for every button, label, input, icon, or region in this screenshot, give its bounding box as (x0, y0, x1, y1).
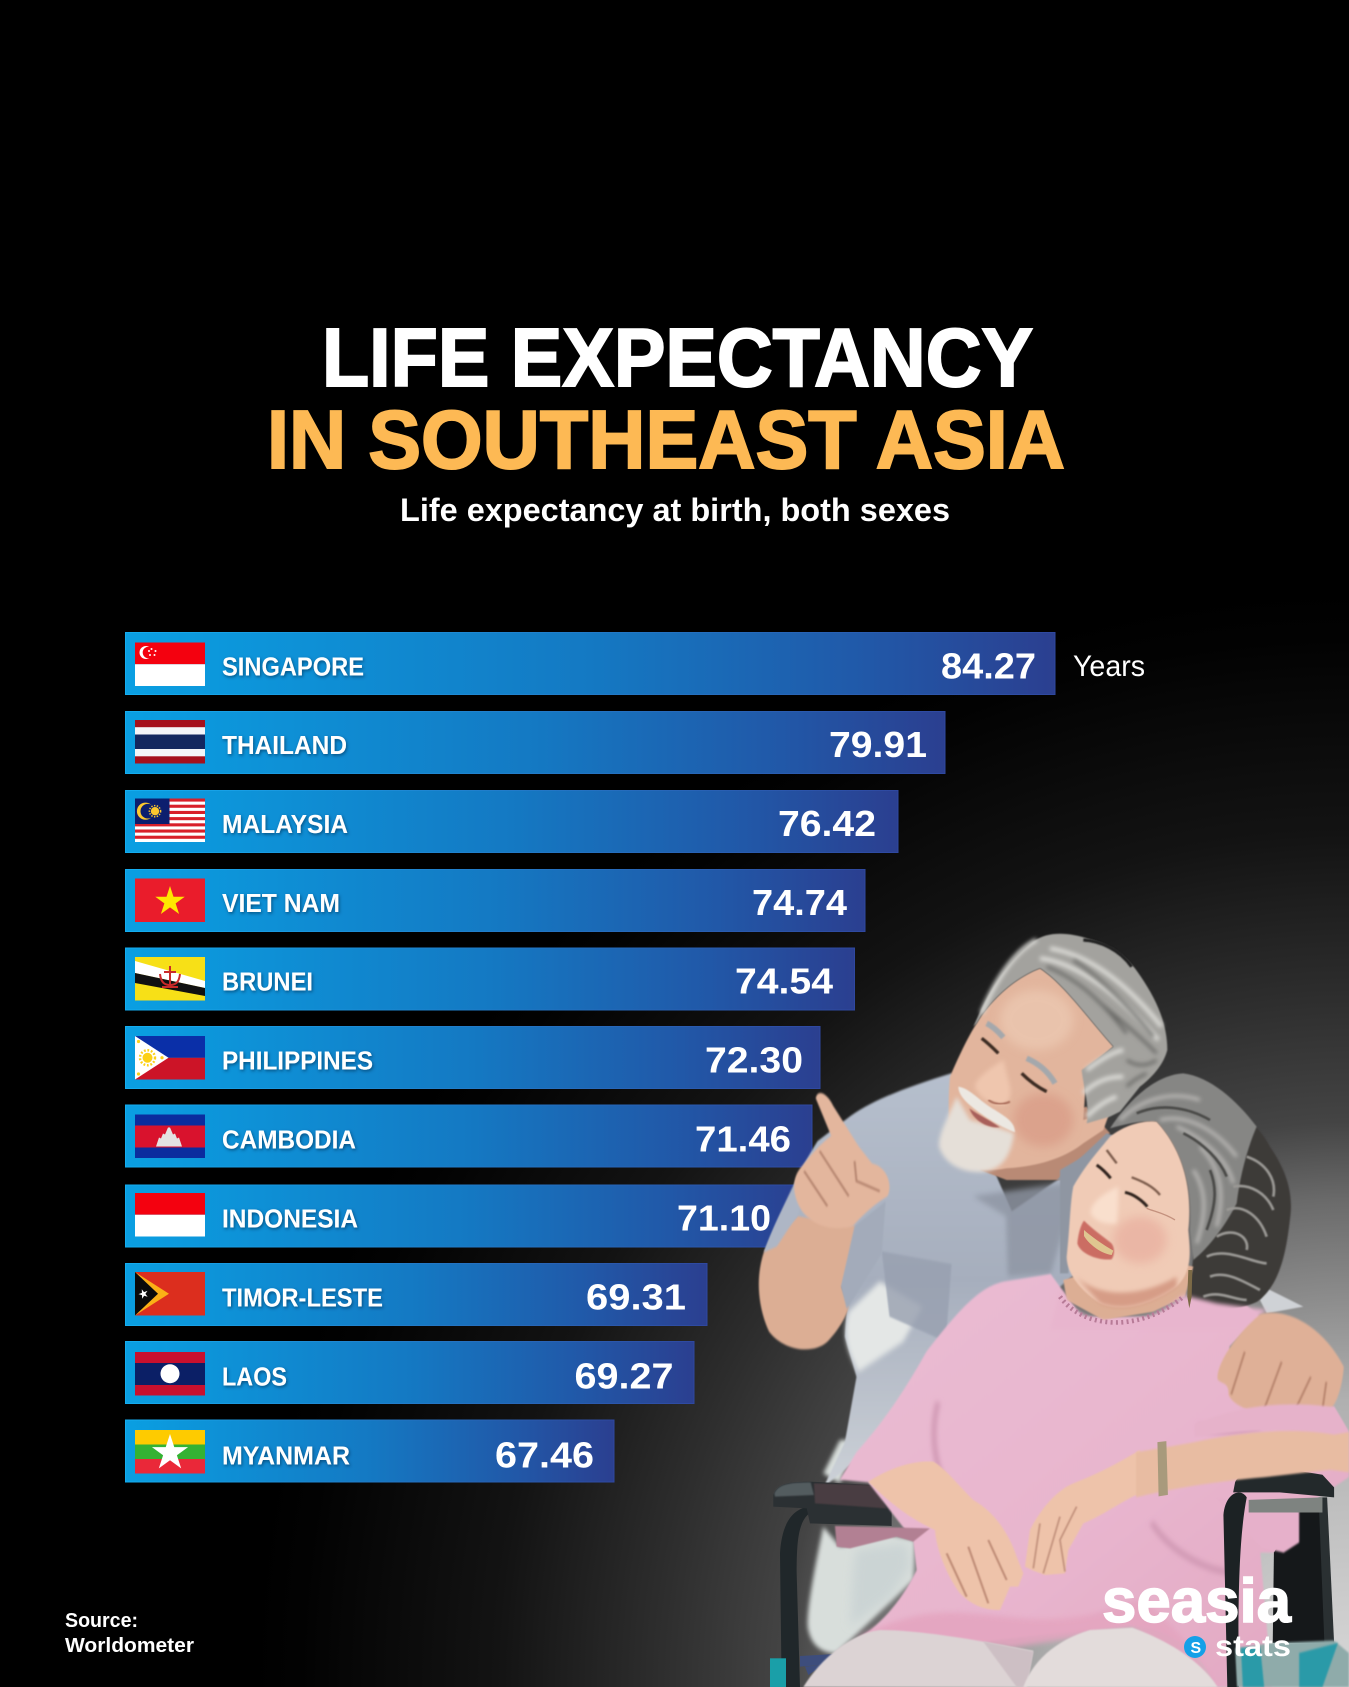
hair dark strands (1137, 1108, 1227, 1230)
source note: Source: (65, 1609, 138, 1632)
neck (980, 1107, 1110, 1180)
wheelchair: right rear pole (1319, 1497, 1334, 1643)
flag: Thailand (135, 720, 205, 764)
hair black strand (1083, 940, 1132, 967)
hair (973, 934, 1167, 1123)
shirt behind face (1060, 1145, 1103, 1273)
wheelchair: teal straps (1241, 1643, 1338, 1687)
man: sleeve behind wrist (764, 1169, 808, 1252)
row: Cambodia (126, 1105, 812, 1167)
logo: seasia stats: seasia (1102, 1567, 1292, 1636)
row: Malaysia (126, 790, 898, 852)
row: Philippines (126, 1026, 820, 1088)
man: shirt shadow (973, 1181, 1078, 1276)
row: Brunei (126, 948, 854, 1010)
woman: pink frill (1216, 1497, 1299, 1553)
trouser left leg (803, 1630, 1033, 1687)
row: Indonesia (126, 1185, 806, 1247)
label: Malaysia: MALAYSIA (222, 811, 348, 839)
man: sleeve beside arm (841, 1201, 886, 1309)
right hand (1025, 1450, 1140, 1575)
cheek (1113, 1217, 1167, 1263)
row: Laos (126, 1342, 694, 1404)
ruffle lines (1060, 1297, 1183, 1322)
man: forearm (759, 1216, 856, 1349)
wheelchair: left armrest and frame (770, 1482, 892, 1687)
forehead highlight (1000, 990, 1073, 1050)
armrest (773, 1482, 892, 1526)
eyes (1097, 1165, 1147, 1207)
moustache (958, 1087, 1015, 1132)
lips (1077, 1221, 1114, 1259)
title: LIFE EXPECTANCY (322, 311, 1033, 404)
hem shading (856, 1598, 1216, 1687)
label: Myanmar: MYANMAR (222, 1442, 350, 1470)
nose (1091, 1187, 1118, 1224)
mouth (969, 1108, 1000, 1127)
label: Indonesia: INDONESIA (222, 1206, 358, 1234)
flag: Myanmar (135, 1430, 205, 1474)
shoulder sleeve of man (1260, 1288, 1303, 1313)
outer curls (1188, 1117, 1291, 1309)
left arm and hand (868, 1461, 1023, 1610)
flag: Indonesia (135, 1193, 205, 1236)
trouser knit (983, 1642, 1033, 1687)
value: Malaysia: 76.42 (778, 803, 876, 844)
value: Philippines: 72.30 (705, 1040, 803, 1080)
beard (939, 1097, 1014, 1172)
photo: elderly couple with wheelchair (759, 934, 1349, 1687)
teal clip (770, 1658, 786, 1687)
woman: sheer sleeve, trousers and hands (803, 1450, 1218, 1687)
right eye (1022, 1073, 1047, 1092)
value: Viet Nam: 74.74 (752, 882, 847, 923)
cheek (1013, 1093, 1073, 1147)
left hand finger lines (947, 1540, 1007, 1603)
earring (1187, 1270, 1192, 1308)
man: knuckle lines (1231, 1352, 1326, 1422)
flag: Cambodia (135, 1114, 205, 1158)
wheelchair: grey bracket (1249, 1497, 1322, 1512)
man: trousers (808, 1440, 915, 1653)
label: Philippines: PHILIPPINES (222, 1048, 373, 1076)
flag: Laos (135, 1352, 205, 1396)
right hand finger lines (1033, 1507, 1077, 1573)
curl highlights (1203, 1157, 1274, 1300)
nostril (988, 1100, 1010, 1104)
face (1067, 1121, 1190, 1307)
label: Laos: LAOS (222, 1364, 287, 1392)
hair dark strands (1047, 960, 1157, 1087)
logo badge (1184, 1636, 1206, 1658)
source note (65, 1609, 194, 1657)
source note: Worldometer (65, 1634, 194, 1657)
flag: Timor-Leste (135, 1272, 205, 1316)
flag: Malaysia (135, 798, 205, 842)
flag: Viet Nam (135, 878, 205, 922)
value: Myanmar: 67.46 (495, 1434, 594, 1476)
title (267, 311, 1065, 486)
man: right hand (1217, 1313, 1344, 1424)
wheelchair: dark back panel (1273, 1510, 1327, 1643)
label: Timor-Leste: TIMOR-LESTE (222, 1284, 383, 1312)
value: Timor-Leste: 69.31 (586, 1276, 686, 1318)
label: Viet Nam: VIET NAM (222, 890, 340, 918)
value: Cambodia: 71.46 (695, 1118, 791, 1160)
row: Myanmar (126, 1420, 614, 1482)
neck (1063, 1257, 1193, 1320)
hair light strands (982, 940, 1162, 1117)
value: Laos: 69.27 (574, 1356, 674, 1396)
wheelchair: right armrest (1233, 1470, 1334, 1497)
flag: Philippines (135, 1036, 205, 1080)
value: Singapore: 84.27 (941, 646, 1036, 686)
label: Singapore: SINGAPORE (222, 654, 364, 682)
eyebrows (987, 1023, 1055, 1083)
wheelchair: bag (1235, 1640, 1349, 1687)
man: shirt (764, 1073, 1107, 1487)
logo: seasia stats: stats (1215, 1630, 1291, 1663)
ruffled collar (1050, 1290, 1267, 1330)
inner hair band (1110, 1073, 1257, 1260)
value: Thailand: 79.91 (829, 724, 927, 765)
bar chart (126, 632, 1145, 1482)
woman: forearm (1136, 1431, 1349, 1497)
nose (975, 1060, 1010, 1105)
blue foot bar (800, 1654, 835, 1675)
woman: pink cuff (1194, 1404, 1349, 1437)
sheer sleeve over armrest (814, 1483, 887, 1508)
man: head (939, 934, 1167, 1180)
label: Thailand: THAILAND (222, 732, 347, 760)
logo badge: S (1190, 1640, 1202, 1657)
top body (840, 1274, 1349, 1687)
label: Cambodia: CAMBODIA (222, 1126, 356, 1154)
value: Indonesia: 71.10 (677, 1198, 771, 1238)
title: IN SOUTHEAST ASIA (267, 393, 1065, 486)
wheelchair: right pole (1223, 1492, 1247, 1687)
chin shade (1073, 1273, 1177, 1307)
face (949, 968, 1113, 1170)
row: Thailand (126, 712, 945, 774)
subtitle: Life expectancy at birth, both sexes (400, 492, 950, 528)
man: torso and arm (759, 1073, 1107, 1487)
brows (1107, 1150, 1160, 1195)
row: Viet Nam (126, 870, 865, 932)
smile wrinkle (1147, 1208, 1175, 1220)
flag: Brunei (135, 957, 205, 1000)
trouser right leg (1023, 1628, 1218, 1687)
man: finger lines (804, 1151, 880, 1206)
woman: head (1050, 1073, 1303, 1330)
man: shirt pocket (882, 1251, 952, 1342)
teeth (1084, 1230, 1113, 1255)
armrest end (774, 1482, 814, 1497)
left eye (982, 1038, 998, 1053)
flag: Singapore (135, 642, 205, 686)
woman: bracelet (1157, 1441, 1168, 1496)
top fold shadows (934, 1402, 1260, 1573)
hair light strands (1120, 1096, 1237, 1243)
value: Brunei: 74.54 (735, 960, 833, 1002)
shirt at neck (1057, 1133, 1117, 1180)
row: Timor-Leste (126, 1264, 707, 1326)
row: Singapore (126, 632, 1055, 694)
woman: pink top (840, 1274, 1349, 1687)
frame pole (780, 1507, 812, 1687)
man: undershirt (846, 1282, 923, 1372)
sheer sleeve (835, 1526, 930, 1548)
unit label: Years (1073, 650, 1145, 683)
man: pointing hand (794, 1093, 890, 1228)
man and woman: right arms, wheelchair right side (1136, 1313, 1349, 1687)
label: Brunei: BRUNEI (222, 968, 313, 996)
